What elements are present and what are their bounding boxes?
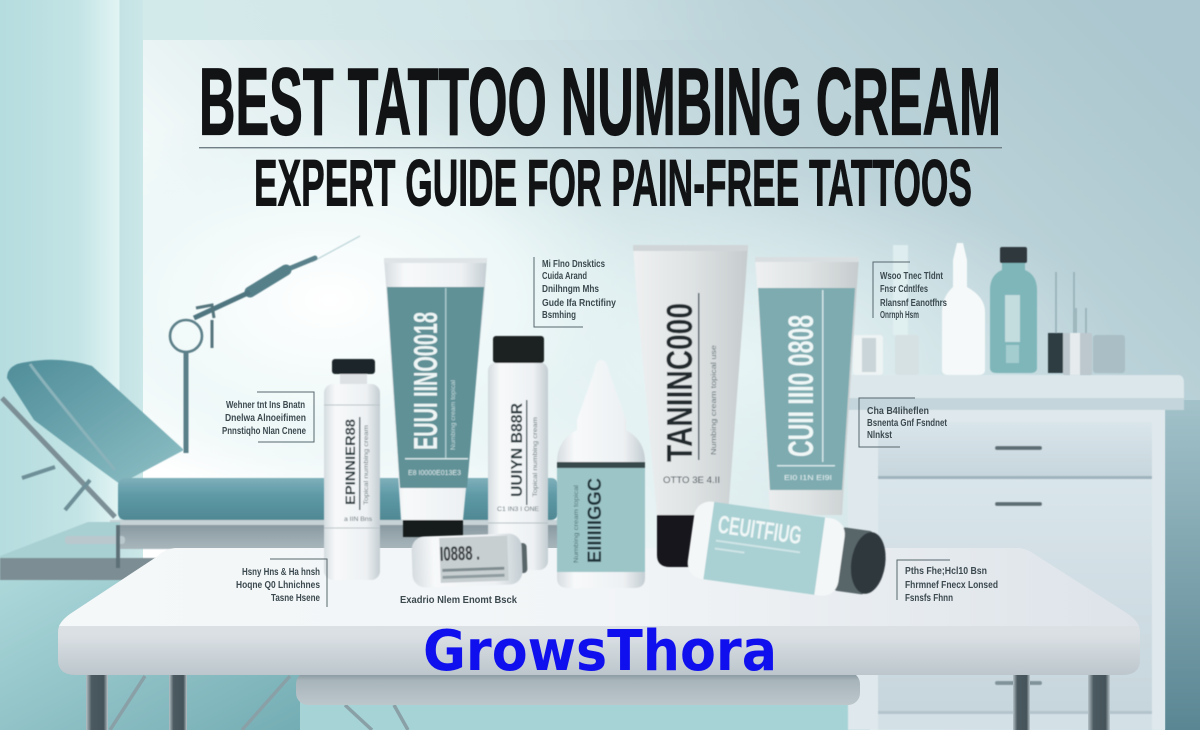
product: teal tube 1: Numbing cream topical <box>451 380 457 450</box>
product: nozzle bottle: Numbing cream topical <box>574 485 580 563</box>
product: large white tube: Numbing cream topical use <box>711 345 718 455</box>
product: right white bottle 2 <box>488 336 548 570</box>
title divider <box>199 147 1002 148</box>
cabinet <box>848 375 1184 730</box>
callout: lower right <box>897 560 998 604</box>
callout: top centre: Mi Flno Dnsktics <box>542 258 605 270</box>
product: teal tube 1: E8 I0000E013E3 <box>408 470 461 477</box>
product: large white tube <box>633 245 748 567</box>
callout: lower left: Hoqne Q0 Lhnichnes <box>236 579 320 591</box>
callout: cabinet: Bsnenta Gnf Fsndnet <box>867 417 947 429</box>
callout: lower right: Fsnsfs Fhnn <box>905 592 953 604</box>
callout: lower right: Pths Fhe;Hcl10 Bsn <box>905 565 987 577</box>
callout: top right: Rlansnf Eanotfhrs <box>880 297 947 309</box>
callout: top centre <box>534 257 616 327</box>
callout: top right <box>873 262 947 321</box>
product: nozzle bottle: EIIIIIIGGC <box>585 478 606 563</box>
callout: top centre: Bsmhing <box>542 309 576 321</box>
callout: top right: Fnsr Cdntlfes <box>880 283 928 295</box>
product: teal tube 2: EI0 I1N EI9I <box>784 475 832 482</box>
product: teal tube 2: CUII III0 0808 <box>782 315 821 457</box>
callout: cabinet: Nlnkst <box>867 429 892 441</box>
callout: lower left: Hsny Hns & Ha hnsh <box>242 566 320 578</box>
callout: left <box>222 392 314 442</box>
shelf products <box>853 243 1125 375</box>
product: right white bottle 2: UUIYN B88R <box>509 403 526 497</box>
callout: top centre: Gude Ifa Rnctifiny <box>542 297 616 309</box>
table <box>58 548 1140 730</box>
callout: top centre: Cuida Arand <box>542 270 587 282</box>
product: lying small bottle <box>411 533 528 588</box>
callout: left: Wehner tnt Ins Bnatn <box>226 399 305 411</box>
callout: bottom centre: Exadrio Nlem Enomt Bsck <box>400 594 517 606</box>
product: nozzle bottle <box>557 360 645 588</box>
product: lying teal bottle: CEUITFIUG <box>716 511 803 550</box>
product: left white bottle: a IIN Bns <box>344 516 373 523</box>
callout: lower right: Fhrmnef Fnecx Lonsed <box>905 579 998 591</box>
callout: left: Dnelwa Alnoeifimen <box>225 412 306 424</box>
tattoo machine on stand <box>170 236 360 453</box>
product: teal tube 2 <box>755 257 859 515</box>
product: lying small bottle: I0888 . <box>439 543 480 566</box>
product: large white tube: TANIINC000 <box>659 303 700 462</box>
product: lying teal bottle <box>686 499 890 604</box>
product: teal tube 1 <box>384 258 487 537</box>
treatment chair <box>0 360 560 580</box>
product: teal tube 1: EUUI IINO0018 <box>407 312 444 450</box>
callout: top centre: Dnilhngm Mhs <box>542 283 599 295</box>
product: left white bottle: Topical numbing cream <box>364 425 370 505</box>
product: right white bottle 2: C1 IN3 I ONE <box>497 506 540 513</box>
watermark: GrowsThora: GrowsThora <box>423 619 777 684</box>
callout: cabinet: Cha B4Iiheflen <box>867 405 929 417</box>
product: left white bottle: EPINNIER88 <box>342 419 358 505</box>
product: left white bottle <box>324 359 380 580</box>
callout: lower left <box>236 559 327 607</box>
product: right white bottle 2: Topical numbing cream <box>533 417 539 497</box>
callout: top right: Wsoo Tnec Tldnt <box>880 270 943 282</box>
callout: lower left: Tasne Hsene <box>271 592 320 604</box>
callout: left: Pnnstiqho Nlan Cnene <box>222 425 306 437</box>
callout: top right: Onrnph Hsm <box>880 309 919 321</box>
callout: cabinet <box>859 398 947 447</box>
product: large white tube: OTTO 3E 4.II <box>663 475 720 485</box>
